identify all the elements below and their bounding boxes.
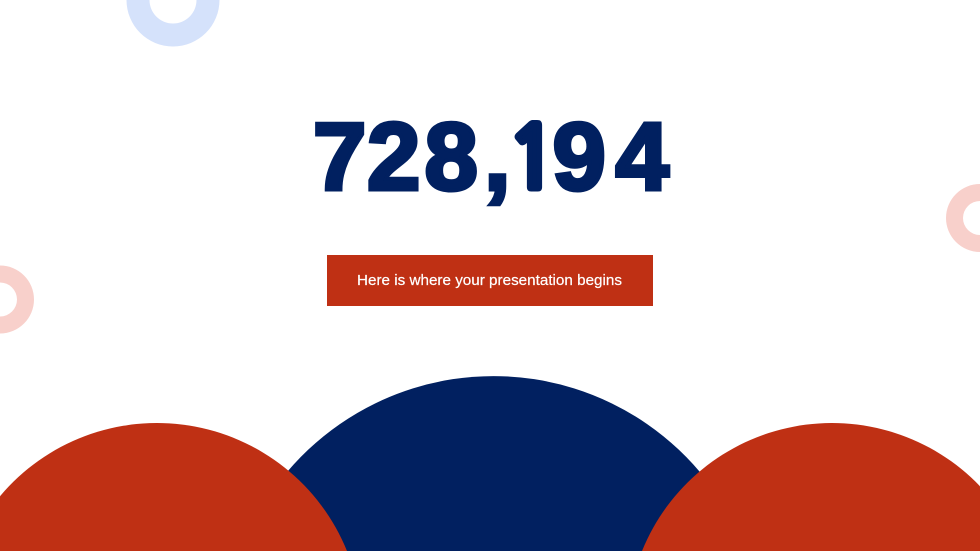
- subtitle banner: [327, 255, 653, 306]
- red semicircle right: [642, 423, 980, 551]
- title: big number: 728,: [313, 104, 511, 210]
- title: big number: 94: [552, 104, 669, 210]
- red semicircle left: [0, 423, 347, 551]
- subtitle banner: Here is where your presentation begins: [357, 272, 622, 289]
- navy semicircle centre: [241, 376, 746, 551]
- icon: pink ring right: [946, 184, 980, 252]
- title: big number: 1: [506, 116, 559, 201]
- icon: blue ring top: [126, 0, 220, 46]
- icon: pink ring left: [0, 266, 34, 334]
